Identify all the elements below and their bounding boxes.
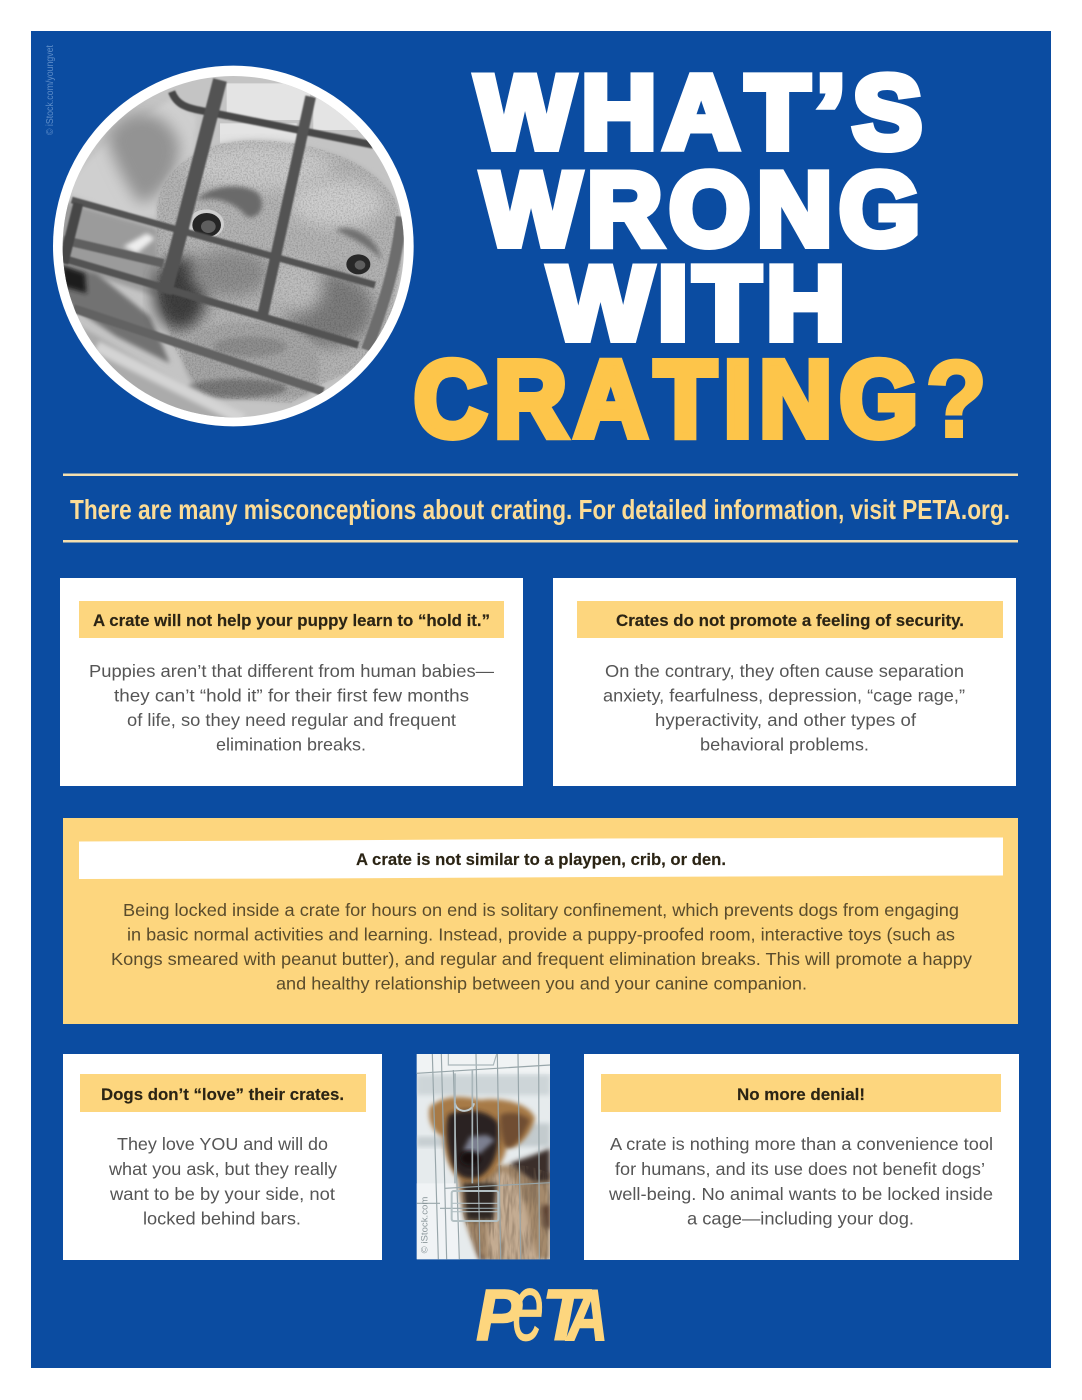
panel: playpen, crib, or den — [63, 818, 1018, 1024]
panel: hold it: they can’t “hold it” for their first few months — [114, 686, 469, 706]
panel: security — [553, 578, 1016, 786]
title: WRONG — [482, 152, 920, 268]
panel: security: On the contrary, they often cause separation — [605, 661, 964, 681]
panel: playpen, crib, or den: A crate is not similar to a playpen, crib, or den. — [356, 850, 726, 869]
panel: dogs don't love crates: locked behind bars. — [143, 1208, 301, 1228]
panel: playpen, crib, or den: Being locked inside a crate for hours on end is solitary confinement, which prevents dogs from engaging — [123, 900, 959, 920]
panel: hold it: of life, so they need regular and frequent — [127, 710, 456, 730]
panel: no more denial: A crate is nothing more than a convenience tool — [610, 1134, 993, 1154]
logo: PETA: e — [512, 1254, 544, 1361]
panel: dogs don't love crates — [63, 1054, 382, 1260]
eyes — [188, 209, 224, 239]
panel: playpen, crib, or den: and healthy relationship between you and your canine companion. — [276, 974, 807, 994]
logo: PETA: P — [476, 1276, 523, 1356]
photo credit: puppy: © iStock.com — [420, 1197, 430, 1253]
panel: no more denial: No more denial! — [737, 1085, 865, 1104]
panel: dogs don't love crates: what you ask, but they really — [108, 1159, 337, 1179]
title: WHAT’S — [476, 55, 922, 171]
panel: security: anxiety, fearfulness, depression, “cage rage,” — [603, 686, 965, 706]
panel: security: hyperactivity, and other types of — [655, 710, 916, 730]
logo: PETA — [476, 1254, 608, 1361]
panel: dogs don't love crates: They love YOU and will do — [117, 1134, 328, 1154]
panel: hold it — [60, 578, 523, 786]
panel: no more denial: a cage—including your dog. — [687, 1208, 914, 1228]
panel: no more denial: well-being. No animal wants to be locked inside — [608, 1184, 993, 1204]
panel: playpen, crib, or den: in basic normal activities and learning. Instead, provide a puppy-proofed room, interactive toys (such as — [127, 924, 955, 944]
panel: security: behavioral problems. — [700, 734, 869, 754]
photo: puppy in wire crate — [417, 1054, 550, 1260]
panel: no more denial — [584, 1054, 1019, 1260]
panel: hold it: elimination breaks. — [216, 734, 366, 754]
photo: dog behind crate bars — [50, 63, 417, 430]
logo: PETA: T — [542, 1276, 592, 1356]
title: CRATING? — [414, 340, 987, 460]
title — [414, 55, 987, 460]
crate bars — [63, 80, 402, 392]
title: WITH — [549, 244, 845, 361]
panel: dogs don't love crates: want to be by your side, not — [109, 1184, 335, 1204]
panel: hold it: A crate will not help your puppy learn to “hold it.” — [93, 611, 490, 630]
panel: hold it: Puppies aren’t that different from human babies— — [89, 661, 495, 681]
fur texture — [157, 140, 401, 403]
panel: security: Crates do not promote a feeling of security. — [616, 611, 964, 630]
panel: no more denial: for humans, and its use does not benefit dogs’ — [615, 1159, 985, 1179]
logo: PETA: A — [565, 1276, 608, 1356]
panel: playpen, crib, or den: Kongs smeared with peanut butter), and regular and frequent elimination breaks. This will promote a happy — [111, 949, 972, 969]
photo credit: dog: © iStock.com/youngvet — [45, 45, 56, 135]
panel: dogs don't love crates: Dogs don’t “love” their crates. — [101, 1085, 344, 1104]
